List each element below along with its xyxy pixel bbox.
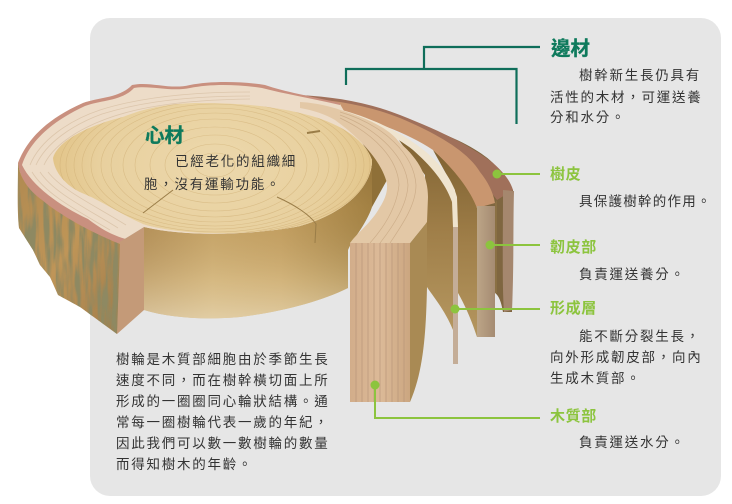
heading: phloem: 韌皮部 xyxy=(550,238,597,256)
text block: tree rings explanation: 因此我們可以數一數樹輪的數量 xyxy=(116,435,330,451)
text: cambium description: 能不斷分裂生長， xyxy=(579,329,701,344)
text: sapwood description: 樹幹新生長仍具有 xyxy=(579,67,701,83)
text: bark description: 具保護樹幹的作用。 xyxy=(579,193,712,209)
label: sapwood xyxy=(550,38,702,125)
label: bark xyxy=(550,165,712,209)
heading: sapwood: 邊材 xyxy=(551,38,590,60)
cambium layer xyxy=(300,102,458,364)
label: phloem xyxy=(550,238,686,282)
text block: tree rings explanation: 常每一圈樹輪代表一歲的年紀， xyxy=(116,414,330,430)
label: xylem xyxy=(550,407,686,450)
annual growth rings xyxy=(60,94,370,236)
trunk side xyxy=(144,160,372,318)
bark rim on top xyxy=(18,82,340,245)
xylem layer xyxy=(300,102,428,402)
text block: tree rings explanation: 形成的一圈圈同心輪狀結構。通 xyxy=(116,393,330,409)
text block: tree rings explanation: 速度不同，而在樹幹橫切面上所 xyxy=(116,372,330,388)
heading: cambium: 形成層 xyxy=(550,299,597,317)
text: cambium description: 向外形成韌皮部，向內 xyxy=(550,350,702,365)
cracks xyxy=(143,131,320,243)
heading: bark: 樹皮 xyxy=(550,165,581,183)
connector: bark xyxy=(492,170,540,178)
sapwood growth rings xyxy=(30,92,250,230)
illustration: cut tree trunk xyxy=(18,82,514,402)
text: phloem description: 負責運送養分。 xyxy=(579,267,686,282)
text: heartwood description: 胞，沒有運輸功能。 xyxy=(144,176,281,192)
text block: tree rings explanation: 樹輪是木質部細胞由於季節生長 xyxy=(116,351,330,367)
text block: tree rings explanation: 而得知樹木的年齡。 xyxy=(116,456,253,472)
heading: heartwood: 心材 xyxy=(145,125,184,147)
sapwood ring on top xyxy=(18,83,372,243)
text: xylem description: 負責運送水分。 xyxy=(579,435,686,450)
connector: phloem xyxy=(486,240,540,250)
outer bark layer xyxy=(300,95,514,312)
text: cambium description: 生成木質部。 xyxy=(550,371,642,386)
phloem layer xyxy=(300,98,497,337)
connector: sapwood bracket xyxy=(346,47,540,124)
cut wedge face xyxy=(117,227,144,334)
text: sapwood description: 活性的木材，可運送養 xyxy=(550,90,702,105)
label: cambium xyxy=(550,299,702,386)
heartwood top surface xyxy=(53,103,372,233)
bark front xyxy=(18,163,120,334)
text: sapwood description: 分和水分。 xyxy=(550,110,626,125)
heading: xylem: 木質部 xyxy=(550,407,597,425)
label: heartwood xyxy=(144,125,297,192)
connector: cambium xyxy=(450,304,540,314)
text: heartwood description: 已經老化的組織細 xyxy=(175,154,297,169)
inner dark cavity xyxy=(305,109,387,207)
connector: xylem xyxy=(370,380,540,418)
